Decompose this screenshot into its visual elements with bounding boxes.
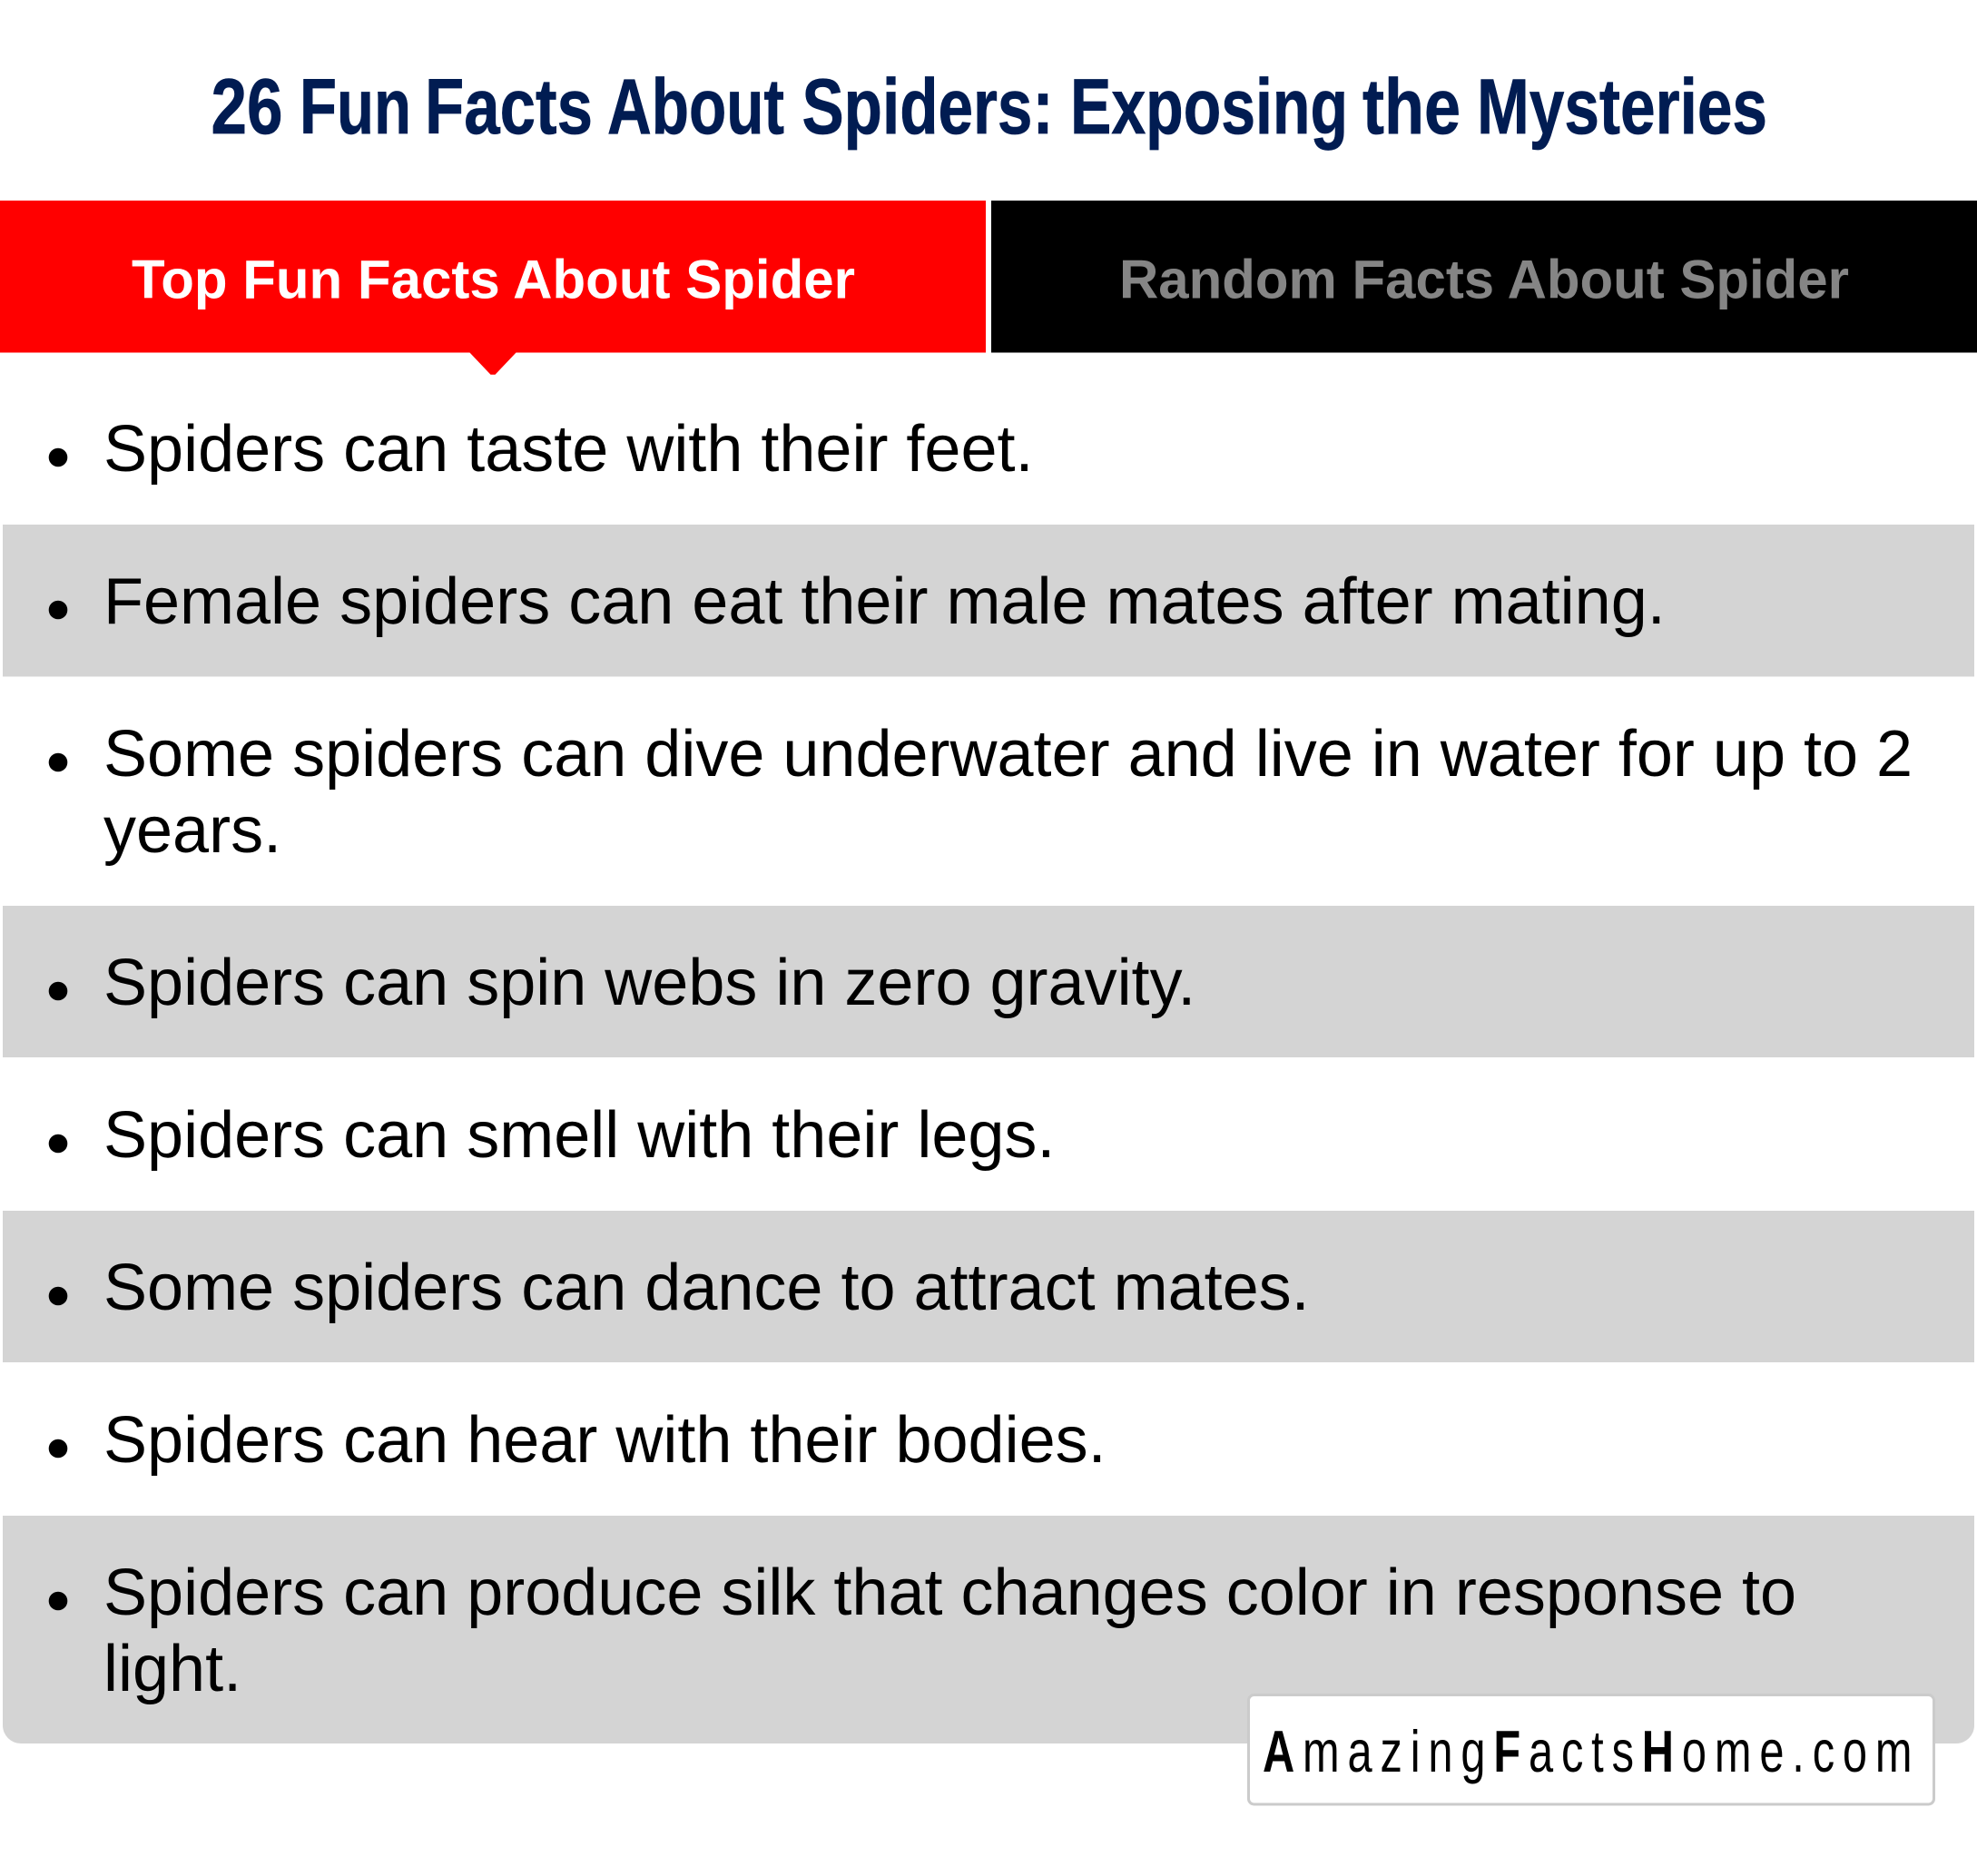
tab: top fun facts (active): [0, 201, 986, 375]
watermark: AmazingFactsHome.com: [1249, 1695, 1933, 1804]
title: Spiders:: [802, 64, 1053, 151]
title: the: [1362, 64, 1461, 151]
fact row 8: [3, 1516, 1974, 1743]
title: Mysteries: [1477, 64, 1767, 151]
title: Exposing: [1070, 64, 1348, 151]
title: Facts: [425, 64, 593, 151]
title: Fun: [300, 64, 411, 151]
fact row 6: Some spiders can dance to attract mates.: [103, 1252, 1310, 1324]
tab: top fun facts (active): Top Fun Facts About Spider: [132, 249, 855, 310]
fact list panel: [3, 413, 1974, 1743]
fact row 3: years.: [103, 794, 281, 867]
fact row 3: [49, 718, 1913, 867]
fact row 8: Spiders can produce silk that changes color in response to: [103, 1557, 1796, 1629]
tab: random facts (inactive): [991, 201, 1977, 352]
tab: random facts (inactive): Random Facts About Spider: [1119, 249, 1849, 310]
fact row 6: [3, 1211, 1974, 1362]
title: 26: [211, 64, 283, 151]
fact row 7: Spiders can hear with their bodies.: [103, 1404, 1107, 1477]
fact row 1: Spiders can taste with their feet.: [103, 413, 1034, 486]
fact row 4: [3, 906, 1974, 1057]
fact row 2: [3, 525, 1974, 677]
watermark: AmazingFactsHome.com: AmazingFactsHome.com: [1263, 1719, 1913, 1785]
fact row 4: Spiders can spin webs in zero gravity.: [103, 947, 1195, 1019]
fact row 5: Spiders can smell with their legs.: [103, 1099, 1055, 1172]
fact row 8: light.: [103, 1633, 241, 1705]
title: [211, 64, 1767, 151]
fact row 3: Some spiders can dive underwater and live in water for up to 2: [103, 718, 1913, 791]
title: About: [607, 64, 784, 151]
fact row 2: Female spiders can eat their male mates after mating.: [103, 565, 1666, 638]
